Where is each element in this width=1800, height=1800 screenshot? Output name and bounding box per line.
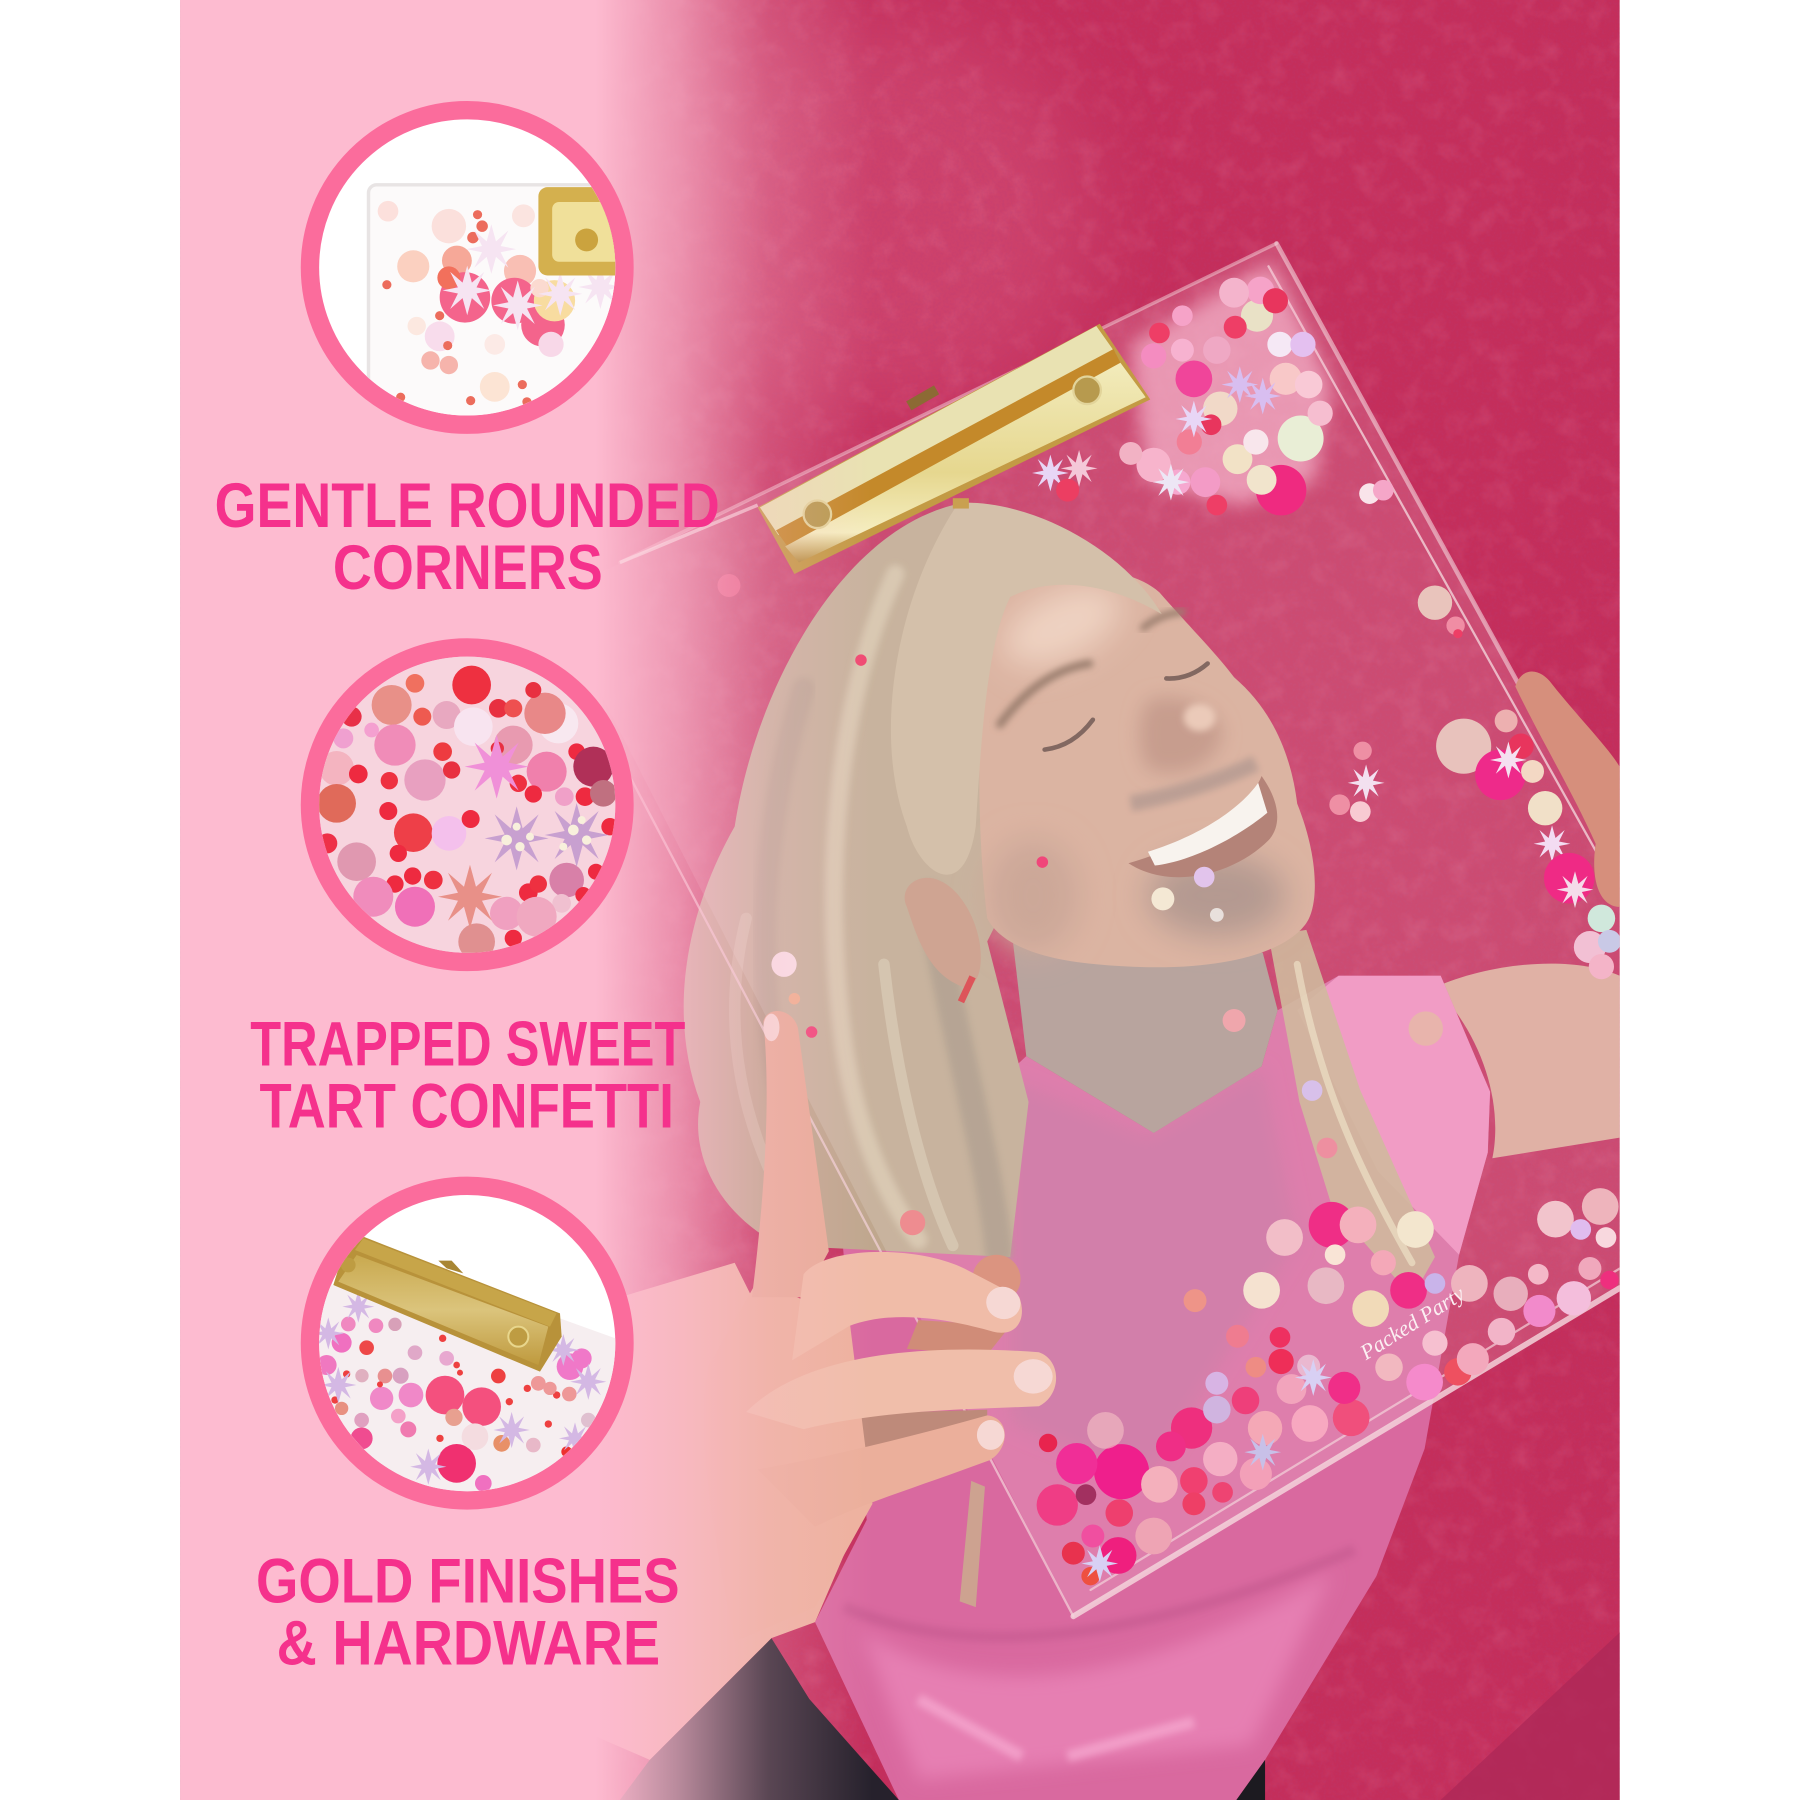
- feature 1: rounded corners: [215, 110, 720, 603]
- inset circle: clipboard corner: [310, 110, 644, 460]
- caption: & HARDWARE: [277, 1609, 660, 1679]
- closed eyes and brows: [1000, 612, 1208, 750]
- gold clip detail: [333, 1237, 562, 1372]
- brand signature: Packed Party: [1355, 1282, 1469, 1365]
- textured pink wall: [180, 0, 1620, 1800]
- face: [905, 570, 1315, 1003]
- finger shadows: [972, 1255, 1021, 1303]
- little finger: [758, 1415, 1005, 1527]
- inset circle: gold clip close-up: [310, 1186, 624, 1510]
- hair strands: [735, 574, 1412, 1263]
- clipboard edges: [620, 243, 1791, 1616]
- right hand holding board: [1515, 672, 1620, 907]
- nose: [1139, 697, 1223, 773]
- caption: [215, 471, 720, 603]
- caption: TART CONFETTI: [259, 1071, 674, 1141]
- right arm: [1435, 964, 1620, 1158]
- clipboard acrylic tint: [668, 244, 1620, 1613]
- hair fringe over forehead: [891, 503, 1162, 875]
- inset circle: confetti close-up: [310, 647, 624, 963]
- feature 3: gold hardware: [256, 1186, 680, 1679]
- gold clip: [758, 324, 1150, 574]
- smile: [1128, 763, 1277, 877]
- feature 2: trapped confetti: [250, 647, 685, 1141]
- palm: [704, 1280, 872, 1642]
- black trousers: [620, 1638, 1265, 1800]
- caption: GENTLE ROUNDED: [215, 471, 720, 541]
- left hand and arm: [562, 1011, 1056, 1760]
- caption: CORNERS: [333, 533, 603, 603]
- confetti: loose dots: [717, 574, 1443, 1235]
- ear with earring: [905, 878, 981, 1003]
- neck: [1013, 943, 1278, 1133]
- hair: [684, 503, 1435, 1607]
- shirt: [815, 976, 1490, 1800]
- ring finger: [746, 1349, 1056, 1429]
- photo: woman behind confetti clipboard against pink wall: [180, 0, 1620, 1800]
- caption: [256, 1547, 680, 1679]
- confetti: bottom cluster: [1037, 1188, 1619, 1585]
- gold clip detail: [538, 187, 624, 276]
- caption: [250, 1009, 685, 1141]
- caption: GOLD FINISHES: [256, 1547, 680, 1617]
- index finger: [752, 1011, 829, 1297]
- caption: TRAPPED SWEET: [250, 1009, 685, 1079]
- clipboard highlight crossing into panel: [620, 505, 758, 562]
- confetti: right edge clusters: [1329, 480, 1621, 979]
- middle finger: [792, 1252, 1022, 1360]
- confetti: top right cluster: [1032, 262, 1333, 515]
- fingernails: [763, 1014, 1053, 1450]
- panel: left pink fade over photo: [180, 0, 872, 1800]
- forearm: [562, 1263, 861, 1760]
